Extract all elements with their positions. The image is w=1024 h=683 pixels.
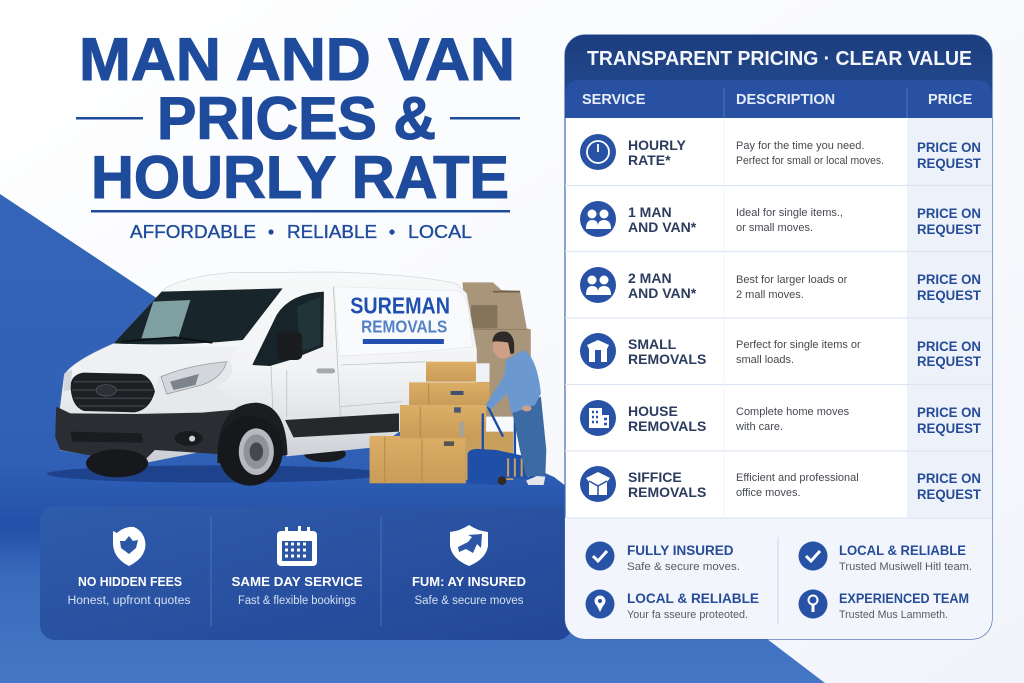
cardboard boxes xyxy=(370,362,513,483)
row: office removals: office moves. xyxy=(736,487,801,499)
row: 1 man and van xyxy=(580,201,982,237)
van body xyxy=(60,272,477,463)
row: small removals: PRICE ON xyxy=(917,339,981,354)
row: office removals: PRICE ON xyxy=(917,471,981,486)
front lower wheel xyxy=(86,449,148,477)
table heading band xyxy=(565,35,992,95)
row: small removals: REMOVALS xyxy=(628,351,706,367)
illustration: van, boxes and mover xyxy=(47,272,546,486)
feature: local and reliable xyxy=(798,542,972,573)
item: fully insured: FUM: AY INSURED xyxy=(412,574,526,589)
row: office removals: REQUEST xyxy=(917,487,982,502)
row: 1 man and van: REQUEST xyxy=(917,222,982,237)
item: same day service: Fast & flexible bookings xyxy=(238,595,356,607)
van lettering: SUREMAN xyxy=(350,292,450,318)
row: house removals: HOUSE xyxy=(628,403,678,419)
feature: local and reliable: Trusted Musiwell Hitl team. xyxy=(839,561,972,573)
row: 2 man and van: Best for larger loads or xyxy=(736,274,848,286)
door handle xyxy=(316,368,335,373)
hood shading xyxy=(77,344,238,376)
row: hourly rate: RATE* xyxy=(628,152,671,168)
item: fully insured: Safe & secure moves xyxy=(414,595,524,607)
feature: experienced team xyxy=(798,590,969,621)
item: no hidden fees: Honest, upfront quotes xyxy=(68,595,191,607)
row: 1 man and van: or small moves. xyxy=(736,222,813,234)
wheel arch xyxy=(217,403,287,463)
small white parcel xyxy=(476,363,490,382)
feature: local and reliable, lower: Your fa sseure proteoted. xyxy=(627,609,748,621)
side sill xyxy=(285,413,399,437)
row: 1 man and van: AND VAN* xyxy=(628,219,697,235)
row: small removals: Perfect for single items or xyxy=(736,339,861,351)
item: fully insured xyxy=(412,525,526,607)
subtitle: RELIABLE xyxy=(287,221,377,242)
row: 2 man and van xyxy=(580,267,982,303)
windscreen xyxy=(114,288,283,344)
row: 2 man and van: AND VAN* xyxy=(628,285,697,301)
row: office removals: REMOVALS xyxy=(628,484,706,500)
row: office removals: Efficient and professional xyxy=(736,472,859,484)
item: same day service: SAME DAY SERVICE xyxy=(232,574,363,589)
row: 1 man and van: Ideal for single items., xyxy=(736,207,843,219)
grille xyxy=(70,373,155,412)
title: HOURLY RATE xyxy=(91,144,509,211)
bumper xyxy=(55,407,238,463)
feature: local and reliable: LOCAL & RELIABLE xyxy=(839,543,966,558)
floor shadow xyxy=(47,465,385,483)
feature: fully insured xyxy=(586,542,740,573)
table heading band: TRANSPARENT PRICING · CLEAR VALUE xyxy=(587,48,972,70)
title: PRICES & xyxy=(157,85,436,152)
van lettering xyxy=(350,292,450,344)
item: no hidden fees: NO HIDDEN FEES xyxy=(78,574,182,589)
row: office removals xyxy=(580,466,982,502)
row: 2 man and van: 2 MAN xyxy=(628,270,672,286)
row: small removals xyxy=(580,333,982,369)
side window xyxy=(252,292,324,366)
subtitle: AFFORDABLE xyxy=(130,221,256,242)
column header row xyxy=(565,80,992,118)
row: house removals xyxy=(580,400,982,436)
hand truck xyxy=(468,407,535,485)
row: house removals: Complete home moves xyxy=(736,406,850,418)
column header row: PRICE xyxy=(928,92,973,108)
row: hourly rate: Pay for the time you need. xyxy=(736,140,864,152)
mover xyxy=(485,331,546,485)
row: hourly rate: REQUEST xyxy=(917,156,982,171)
row: hourly rate: Perfect for small or local moves. xyxy=(736,155,884,167)
row: hourly rate: HOURLY xyxy=(628,137,686,153)
row: house removals: PRICE ON xyxy=(917,405,981,420)
blue diagonal background shape xyxy=(0,194,825,683)
feature: experienced team: Trusted Mus Lammeth. xyxy=(839,609,948,621)
panel: pricing table xyxy=(565,35,992,639)
row: house removals: with care. xyxy=(735,421,783,433)
row: 2 man and van: 2 mall moves. xyxy=(736,289,804,301)
item: same day service xyxy=(232,526,363,607)
item: no hidden fees xyxy=(68,527,191,607)
row: hourly rate xyxy=(580,134,982,171)
feature: local and reliable, lower xyxy=(586,590,759,621)
subtitle: LOCAL xyxy=(408,221,472,242)
title xyxy=(76,26,520,212)
row: small removals: small loads. xyxy=(736,354,794,366)
price column tint xyxy=(907,118,992,518)
row: office removals: SIFFICE xyxy=(628,469,682,485)
side marker lamp left xyxy=(64,369,72,392)
row: 2 man and van: PRICE ON xyxy=(917,272,981,287)
panel: benefits strip xyxy=(40,506,572,640)
subtitle xyxy=(130,221,472,242)
row: small removals: SMALL xyxy=(628,336,677,352)
front wheel xyxy=(218,416,283,486)
feature: local and reliable, lower: LOCAL & RELIABLE xyxy=(627,591,759,606)
row: small removals: REQUEST xyxy=(917,354,982,369)
column header row: DESCRIPTION xyxy=(736,92,835,108)
feature: fully insured: FULLY INSURED xyxy=(627,543,734,558)
headlight xyxy=(161,362,227,394)
title: MAN AND VAN xyxy=(79,26,515,93)
feature: experienced team: EXPERIENCED TEAM xyxy=(839,591,969,606)
row: house removals: REQUEST xyxy=(917,421,982,436)
footer tint xyxy=(565,518,992,639)
row: 1 man and van: PRICE ON xyxy=(917,206,981,221)
back boxes xyxy=(462,282,531,417)
side panel crease xyxy=(334,287,473,356)
row: hourly rate: PRICE ON xyxy=(917,140,981,155)
rear wheel xyxy=(304,446,346,462)
feature: fully insured: Safe & secure moves. xyxy=(627,561,740,573)
wing mirror xyxy=(277,332,302,360)
row: 2 man and van: REQUEST xyxy=(917,288,982,303)
row: 1 man and van: 1 MAN xyxy=(628,204,672,220)
column header row: SERVICE xyxy=(582,92,646,108)
row: house removals: REMOVALS xyxy=(628,418,706,434)
van lettering: REMOVALS xyxy=(361,316,447,336)
